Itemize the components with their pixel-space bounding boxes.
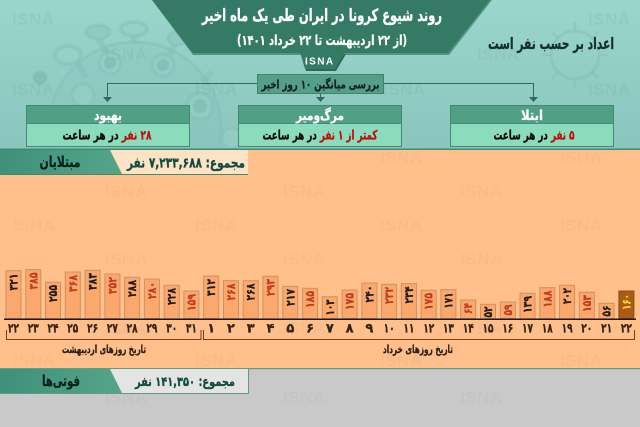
ISNA tag: ISNA	[305, 56, 334, 68]
date axis labels: ۱۷	[522, 322, 533, 336]
panel: orange chart background	[0, 150, 640, 369]
bar value labels: ۵۶	[600, 306, 614, 316]
bar value labels: ۱۳۹	[520, 295, 534, 313]
watermarks: ISNA	[588, 80, 631, 99]
bar value labels: ۱۵۹	[184, 293, 198, 311]
date axis labels: ۹	[365, 322, 373, 336]
bar value labels: ۱۵۳	[580, 294, 594, 312]
panel: recovered: بهبود	[94, 108, 122, 124]
panel: grey deaths background	[0, 369, 640, 427]
date axis labels: ۱۰	[384, 322, 395, 336]
panel: infected: ابتلا	[521, 108, 543, 124]
panel: recovered: ۲۸ نفر در هر ساعت	[62, 128, 152, 144]
date axis labels: ۵	[286, 322, 294, 336]
date axis labels	[8, 322, 632, 336]
watermarks: ISNA	[560, 351, 603, 370]
date axis labels: ۲۲	[621, 322, 632, 336]
bar value labels: ۱۸۵	[303, 291, 317, 308]
watermarks: ISNA	[380, 148, 423, 167]
bar value labels: ۱۸۸	[540, 290, 554, 308]
heading: main title: روند شیوع کرونا در ایران طی یک ماه اخیر	[201, 6, 442, 26]
average heading box	[258, 74, 384, 94]
watermarks: ISNA	[12, 80, 55, 99]
date axis labels: ۸	[346, 322, 354, 336]
watermarks: ISNA	[283, 388, 326, 407]
month brackets	[6, 330, 634, 340]
bar value labels: ۳۸۳	[86, 272, 100, 290]
panel: top teal background	[0, 0, 640, 150]
watermarks: ISNA	[380, 285, 423, 304]
bar value labels: ۲۶۸	[244, 283, 258, 300]
date axis labels: ۴	[267, 322, 275, 336]
connector arrows	[103, 84, 538, 102]
heading: date range: (از ۲۲ اردیبهشت تا ۲۲ خرداد ۱۴۰۱)	[237, 33, 407, 49]
watermarks: ISNA	[105, 182, 148, 201]
watermarks: ISNA	[283, 182, 326, 201]
bar value labels: ۶۴	[461, 303, 475, 314]
watermarks: ISNA	[195, 80, 238, 99]
watermarks: ISNA	[105, 45, 148, 64]
watermarks: ISNA	[560, 216, 603, 235]
date axis labels: ۱۳	[443, 322, 454, 336]
watermarks: ISNA	[477, 45, 520, 64]
watermarks: ISNA	[195, 351, 238, 370]
watermarks: ISNA	[560, 148, 603, 167]
bar value labels: ۲۲۸	[165, 287, 179, 305]
label: Ordibehesht dates: تاریخ روزهای اردیبهشت	[62, 343, 146, 356]
date axis labels: ۱۲	[423, 322, 434, 336]
icon: large virus backdrop	[33, 22, 242, 214]
bar value labels	[6, 272, 633, 318]
section header: infected	[0, 148, 640, 175]
date axis labels: ۳۱	[186, 322, 197, 336]
bar value labels: ۱۰۳	[323, 299, 337, 316]
section header: deaths: مجموع: ۱۴۱,۳۵۰ نفر	[134, 375, 235, 390]
bar value labels: ۱۷۱	[441, 292, 455, 308]
bar value labels: ۵۲	[481, 306, 495, 318]
watermarks: ISNA	[12, 10, 55, 29]
bar value labels: ۱۷۵	[422, 293, 436, 310]
watermarks: ISNA	[380, 351, 423, 370]
section header: infected: مبتلایان	[40, 153, 80, 171]
watermarks: ISNA	[283, 250, 326, 269]
watermarks: ISNA	[460, 319, 503, 338]
watermarks: ISNA	[105, 319, 148, 338]
bar value labels: ۱۷۵	[343, 293, 357, 310]
date axis labels: ۱۶	[502, 322, 513, 336]
section header: deaths: فوتی‌ها	[42, 372, 80, 390]
watermarks: ISNA	[13, 351, 56, 370]
section header: deaths	[0, 368, 640, 394]
panel: recovered	[26, 106, 190, 146]
date axis labels: ۲۷	[107, 322, 118, 336]
bar value labels: ۲۹۳	[264, 278, 278, 296]
bar value labels: ۳۶۸	[66, 274, 80, 292]
bar value labels: ۵۹	[501, 304, 515, 316]
watermarks: ISNA	[560, 285, 603, 304]
date axis labels: ۱۴	[463, 322, 474, 336]
date axis labels: ۶	[306, 322, 314, 336]
date axis labels: ۲۱	[601, 322, 612, 336]
watermarks: ISNA	[460, 250, 503, 269]
bar value labels: ۲۸۰	[145, 282, 159, 299]
watermarks: ISNA	[13, 216, 56, 235]
date axis labels: ۲۸	[127, 322, 138, 336]
panel: deaths	[238, 106, 402, 146]
bar value labels: ۲۴۰	[362, 286, 376, 302]
date axis labels: ۲۲	[8, 322, 19, 336]
bar value labels: ۲۰۲	[560, 288, 574, 304]
bar value labels: ۲۳۴	[402, 286, 416, 304]
section header: infected: مجموع: ۷,۲۳۳,۶۸۸ نفر	[126, 156, 245, 172]
date axis labels: ۲۰	[581, 322, 592, 336]
chart baseline	[4, 318, 636, 320]
date axis labels: ۲۹	[146, 322, 157, 336]
bar value labels: ۲۶۸	[224, 283, 238, 300]
watermarks: ISNA	[195, 216, 238, 235]
date axis labels: ۱۱	[403, 322, 414, 336]
average heading box: بررسی میانگین ۱۰ روز اخیر	[261, 78, 380, 92]
title banner	[152, 0, 492, 71]
date axis labels: ۲۵	[67, 322, 78, 336]
date axis labels: ۳	[247, 322, 255, 336]
bar value labels: ۳۱۲	[204, 278, 218, 296]
label: Khordad dates: تاریخ روزهای خرداد	[383, 343, 453, 356]
bar value labels: ۱۶۰	[619, 294, 633, 310]
panel: deaths: مرگ‌ومیر	[295, 107, 344, 124]
bar value labels: ۳۲۱	[6, 274, 20, 290]
icon: small virus backdrop	[542, 22, 608, 88]
bar value labels: ۳۵۲	[105, 276, 119, 294]
date axis labels: ۲	[227, 322, 235, 336]
date axis labels: ۱۹	[562, 322, 573, 336]
panel: infected: ۵ نفر در هر ساعت	[494, 128, 575, 144]
date axis labels: ۱۵	[482, 322, 494, 336]
date axis labels: ۲۴	[48, 322, 59, 336]
date axis labels: ۱۸	[542, 322, 553, 336]
date axis labels: ۳۰	[166, 322, 177, 336]
watermarks: ISNA	[588, 10, 631, 29]
bar chart: daily infected	[6, 270, 634, 319]
panel: deaths: کمتر از ۱ نفر در هر ساعت	[262, 128, 378, 144]
bar value labels: ۲۳۲	[382, 286, 396, 304]
watermarks: ISNA	[195, 285, 238, 304]
watermarks: ISNA	[13, 285, 56, 304]
watermarks: ISNA	[105, 250, 148, 269]
date axis labels: ۷	[326, 322, 334, 336]
bar value labels: ۲۸۸	[125, 279, 139, 297]
watermarks: ISNA	[460, 182, 503, 201]
panel: infected	[450, 106, 614, 146]
watermarks: ISNA	[383, 80, 426, 99]
watermarks: ISNA	[380, 216, 423, 235]
date axis labels: ۲۳	[28, 322, 39, 336]
date axis labels: ۱	[207, 322, 215, 336]
bar value labels: ۲۱۷	[283, 288, 297, 306]
watermarks: ISNA	[105, 388, 148, 407]
watermarks: ISNA	[283, 319, 326, 338]
bar value labels: ۲۵۵	[46, 285, 60, 302]
watermarks: ISNA	[460, 388, 503, 407]
bar value labels: ۳۸۵	[26, 272, 40, 290]
date axis labels: ۲۶	[87, 322, 98, 336]
